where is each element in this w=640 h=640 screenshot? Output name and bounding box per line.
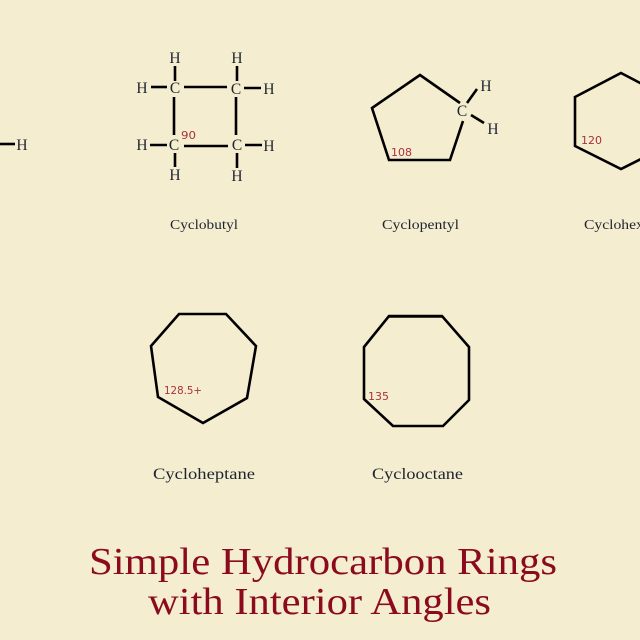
panel: cycloheptane structure: 128.5+ [164,385,202,397]
panel: cyclobutyl structure: H [136,137,148,154]
panel: cyclobutyl structure: H [231,50,243,67]
panel: cyclobutyl structure: H [169,167,181,184]
title: Simple Hydrocarbon Rings [89,541,557,583]
panel: cyclopentyl structure: C [457,103,467,120]
label: Cycloheptane: Cycloheptane [153,466,255,483]
panel: cyclopentyl structure [372,75,499,160]
panel: cyclohexyl structure [575,73,640,169]
panel: cyclobutyl structure: C [170,80,180,97]
panel: cycloheptane structure [151,314,256,423]
panel: cyclopentyl structure: H [480,78,492,95]
panel: cyclobutyl structure: H [263,138,275,155]
panel: cyclooctane structure: 135 [368,391,389,403]
panel: cyclobutyl structure: C [232,137,242,154]
panel: cyclohexyl structure: 120 [581,135,602,147]
panel: cyclobutyl structure: C [231,81,241,98]
label: Cyclopentyl: Cyclopentyl [382,217,459,232]
label: Cyclobutyl: Cyclobutyl [170,217,238,232]
panel: cyclopentyl structure: H [487,121,499,138]
panel: cyclobutyl structure: H [231,168,243,185]
title [89,541,557,623]
panel: cyclooctane structure [364,316,469,426]
panel: cyclobutyl structure: H [136,80,148,97]
label: Cyclooctane: Cyclooctane [372,466,463,483]
partially visible molecule: cropped bond and hydrogen [0,137,28,154]
title: with Interior Angles [148,581,491,623]
panel: cyclobutyl structure: H [169,50,181,67]
panel: cyclopentyl structure: 108 [391,147,412,159]
panel: cyclobutyl structure [136,50,275,185]
panel: cyclobutyl structure: C [169,137,179,154]
partially visible molecule: cropped bond and hydrogen: H [16,137,28,154]
panel: cyclobutyl structure: 90 [181,130,196,142]
panel: cyclobutyl structure: H [263,81,275,98]
